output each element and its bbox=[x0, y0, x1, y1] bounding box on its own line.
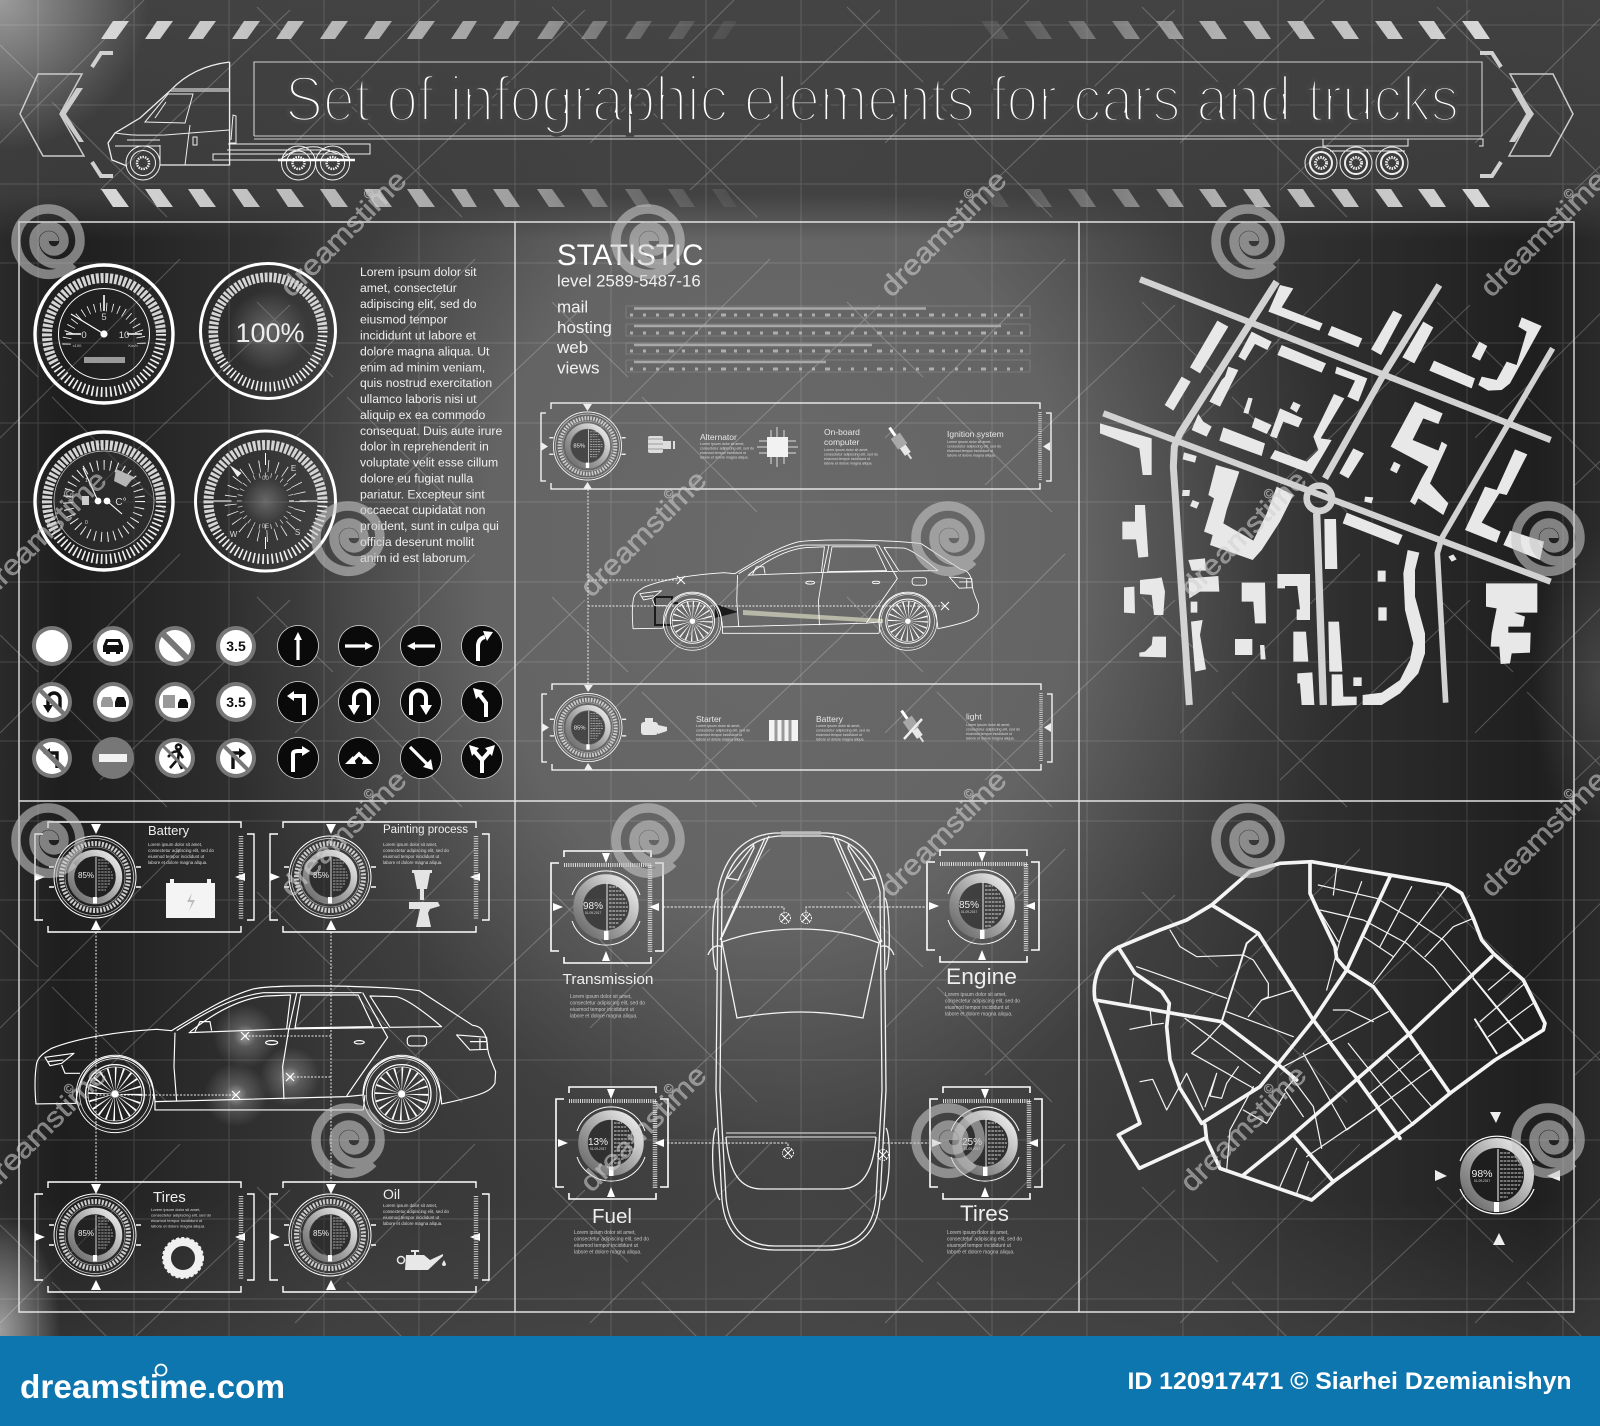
label: oil: Oil bbox=[383, 1186, 400, 1202]
label: ignition system bbox=[947, 429, 1004, 458]
icon: bulb plug bbox=[897, 707, 928, 745]
icon: chip bbox=[757, 427, 798, 467]
label: starter: eiusmod tempor incididunt ut bbox=[696, 733, 742, 737]
icon: starter bbox=[641, 718, 667, 735]
logo: dreamstime.com: dreamstime.com bbox=[20, 1368, 285, 1405]
text: transmission description: labore et dolore magna aliqua. bbox=[570, 1014, 638, 1020]
text: battery description: labore et dolore magna aliqua. bbox=[148, 860, 207, 865]
text block: lorem ipsum: ullamco laboris nisi ut bbox=[360, 392, 477, 406]
gauge: speedometer: Km/h bbox=[128, 343, 138, 348]
card: tires bbox=[35, 1182, 254, 1292]
watermark: dreamstime text: © bbox=[60, 485, 78, 502]
label: battery: consectetur adipiscing elit, sed do bbox=[816, 728, 870, 732]
card: transmission: 98% bbox=[583, 901, 603, 912]
gauge: compass: E bbox=[291, 464, 296, 473]
label: alternator: Lorem ipsum dolor sit amet, bbox=[700, 442, 744, 446]
component strip 1 bbox=[541, 403, 1051, 489]
card: engine: 85% bbox=[959, 900, 979, 911]
watermark: dreamstime text: © bbox=[660, 485, 678, 502]
watermark: dreamstime text: dreamstime bbox=[274, 164, 413, 303]
gauge: compass: 00 bbox=[262, 476, 269, 482]
road signs: prohibition: 3.5 bbox=[226, 638, 246, 654]
card: transmission bbox=[551, 851, 663, 1020]
label: starter: consectetur adipiscing elit, sed do bbox=[696, 728, 750, 732]
gauge: fuel and temperature: 1 bbox=[85, 478, 88, 484]
icon: truck cab bbox=[108, 62, 370, 180]
text block: lorem ipsum: dolore magna aliqua. Ut bbox=[360, 344, 490, 358]
watermark: dreamstime text: © bbox=[1260, 1080, 1278, 1097]
gauge: speedometer: 5 bbox=[101, 312, 107, 323]
icon: battery bbox=[166, 879, 215, 918]
gauge: compass: 0E bbox=[262, 524, 269, 530]
text: fuel description: eiusmod tempor incididunt ut bbox=[574, 1243, 639, 1249]
card: tires bbox=[930, 1087, 1042, 1256]
text: engine description: consectetur adipiscing elit, sed do bbox=[945, 998, 1020, 1004]
footer bar bbox=[0, 1336, 1600, 1426]
label: engine: Engine bbox=[946, 964, 1017, 989]
card: battery bbox=[35, 822, 254, 932]
text block: lorem ipsum: consequat. Duis aute irure bbox=[360, 424, 502, 438]
text: oil description: labore et dolore magna aliqua. bbox=[383, 1221, 442, 1226]
gauge: fuel and temperature bbox=[35, 432, 173, 570]
icon: trailer wheels bbox=[1305, 139, 1483, 179]
watermark: dreamstime text: © bbox=[660, 1080, 678, 1097]
road network bbox=[1094, 862, 1545, 1200]
text: battery description: Lorem ipsum dolor sit amet, bbox=[148, 842, 202, 847]
text: oil description: consectetur adipiscing elit, sed do bbox=[383, 1209, 449, 1214]
label: battery: Battery bbox=[148, 823, 190, 838]
illustration: car top view bbox=[708, 833, 894, 1250]
connector lines bbox=[663, 907, 929, 1151]
gauge ring: painting: 85% bbox=[313, 871, 329, 880]
panel: car service diagram bbox=[35, 822, 496, 1292]
watermark: dreamstime text: dreamstime bbox=[574, 464, 713, 603]
text: transmission description: Lorem ipsum dolor sit amet, bbox=[570, 994, 632, 1000]
label: on-board computer: computer bbox=[824, 437, 860, 447]
label: battery: Battery bbox=[816, 714, 844, 724]
label: ignition system: labore et dolore magna aliqua. bbox=[947, 454, 996, 458]
text block: lorem ipsum: eiusmod tempor bbox=[360, 312, 447, 326]
text: tires description: eiusmod tempor incididunt ut bbox=[151, 1218, 203, 1223]
card: tires: 25% bbox=[962, 1137, 982, 1148]
gauge ring: 85 percent: 85% bbox=[574, 725, 586, 731]
label: ignition system: consectetur adipiscing elit, sed do bbox=[947, 444, 1001, 448]
label: light: light bbox=[966, 712, 982, 722]
card: engine bbox=[927, 850, 1039, 1018]
watermark: dreamstime text: dreamstime bbox=[274, 764, 413, 903]
watermark: dreamstime text: dreamstime bbox=[874, 764, 1013, 903]
gauge ring: 85 percent bbox=[549, 412, 626, 480]
buildings bbox=[1100, 285, 1544, 706]
label: on-board computer: eiusmod tempor incididunt ut bbox=[824, 457, 870, 461]
legend labels: hosting bbox=[557, 318, 612, 337]
legend labels: mail bbox=[557, 298, 588, 316]
gauge: speedometer: x100 bbox=[73, 343, 82, 348]
component strip 2 bbox=[542, 684, 1052, 770]
label: on-board computer bbox=[824, 427, 878, 466]
label: tires: Tires bbox=[960, 1201, 1009, 1226]
icon: right chevron bbox=[1480, 53, 1573, 176]
text: engine description: Lorem ipsum dolor sit amet, bbox=[945, 992, 1007, 998]
label: starter bbox=[696, 714, 750, 742]
heading: statistic: STATISTIC bbox=[557, 239, 703, 272]
connector lines bbox=[96, 932, 331, 1181]
gauge: 100 percent bbox=[200, 264, 336, 398]
text: fuel description: consectetur adipiscing elit, sed do bbox=[574, 1236, 649, 1242]
label: on-board computer: labore et dolore magna aliqua. bbox=[824, 462, 873, 466]
label: light: labore et dolore magna aliqua. bbox=[966, 736, 1015, 740]
text block: lorem ipsum: proident, sunt in culpa qui bbox=[360, 519, 499, 533]
watermark: dreamstime text: © bbox=[1560, 185, 1578, 202]
label: on-board computer: On-board bbox=[824, 427, 860, 437]
text block: lorem ipsum: dolor in reprehenderit in bbox=[360, 440, 489, 454]
credit line: ID 120917471 © Siarhei Dzemianishyn bbox=[1128, 1368, 1572, 1395]
text block: lorem ipsum: Lorem ipsum dolor sit bbox=[360, 265, 477, 279]
label: battery: eiusmod tempor incididunt ut bbox=[816, 733, 862, 737]
gauge: compass: S bbox=[295, 528, 300, 537]
text block: lorem ipsum: amet, consectetur bbox=[360, 281, 457, 295]
label: fuel: Fuel bbox=[592, 1206, 632, 1228]
watermark: dreamstime text: © bbox=[1560, 785, 1578, 802]
text: battery description: eiusmod tempor incididunt ut bbox=[148, 854, 205, 859]
text block: lorem ipsum: aliquip ex ea commodo bbox=[360, 408, 486, 422]
bar chart bbox=[626, 306, 1030, 372]
label: on-board computer: consectetur adipiscing elit, sed do bbox=[824, 452, 878, 456]
watermark: dreamstime text: dreamstime bbox=[574, 1059, 713, 1198]
label: starter: labore et dolore magna aliqua. bbox=[696, 738, 745, 742]
gauge ring: 98 percent bbox=[1435, 1112, 1560, 1245]
text: tires description: Lorem ipsum dolor sit amet, bbox=[947, 1230, 1009, 1236]
watermark: dreamstime text: © bbox=[1260, 485, 1278, 502]
text: painting description: consectetur adipiscing elit, sed do bbox=[383, 848, 449, 853]
text: tires description: labore et dolore magna aliqua. bbox=[151, 1224, 205, 1228]
label: painting process: Painting process bbox=[383, 824, 468, 836]
text: battery description: consectetur adipiscing elit, sed do bbox=[148, 848, 214, 853]
text: painting description: eiusmod tempor incididunt ut bbox=[383, 854, 440, 859]
icon: battery bbox=[769, 720, 798, 741]
watermark: dreamstime text: dreamstime bbox=[874, 164, 1013, 303]
watermark: dreamstime text: © bbox=[360, 185, 378, 202]
icon: left chevron bbox=[20, 53, 113, 176]
card: fuel bbox=[556, 1087, 668, 1256]
card: tires: 01-09-2017 bbox=[964, 1147, 980, 1151]
gauge: speedometer bbox=[35, 265, 173, 403]
text: oil description: eiusmod tempor incididunt ut bbox=[383, 1215, 440, 1220]
decorative dash rows bbox=[101, 21, 1490, 207]
text: engine description: labore et dolore magna aliqua. bbox=[945, 1012, 1013, 1018]
watermark: dreamstime text: © bbox=[960, 785, 978, 802]
gauge ring: battery: 85% bbox=[78, 871, 94, 880]
card: transmission: 01-09-2017 bbox=[585, 911, 601, 915]
road signs: prohibition bbox=[32, 626, 256, 779]
road signs: direction bbox=[278, 626, 502, 778]
text: tires description: consectetur adipiscing elit, sed do bbox=[151, 1212, 212, 1218]
legend labels: web bbox=[556, 338, 588, 357]
card: fuel: 01-09-2017 bbox=[590, 1147, 606, 1151]
card: oil bbox=[270, 1182, 489, 1292]
gauge: 100 percent: 100% bbox=[235, 318, 305, 348]
text: level code: level 2589-5487-16 bbox=[557, 272, 701, 290]
text: transmission description: consectetur adipiscing elit, sed do bbox=[570, 1000, 645, 1006]
card: engine: 01-09-2017 bbox=[961, 910, 977, 914]
label: light bbox=[966, 712, 1020, 740]
gauge: fuel and temperature: C° bbox=[115, 497, 127, 508]
text: painting description: labore et dolore magna aliqua. bbox=[383, 860, 442, 865]
icon: oil can bbox=[398, 1250, 446, 1270]
gauge ring: 98 percent: 98% bbox=[1471, 1168, 1493, 1180]
label: tires: Tires bbox=[153, 1189, 186, 1206]
watermark: dreamstime text: dreamstime bbox=[1174, 1059, 1313, 1198]
title frame bbox=[254, 62, 1482, 139]
text block: lorem ipsum: occaecat cupidatat non bbox=[360, 503, 485, 517]
road signs: prohibition: 3.5 bbox=[226, 694, 246, 710]
gauge ring: oil: 85% bbox=[313, 1229, 329, 1238]
text block: lorem ipsum: anim id est laborum. bbox=[360, 551, 470, 565]
gauge: compass bbox=[196, 431, 336, 571]
watermark: dreamstime text: © bbox=[960, 185, 978, 202]
gauge: speedometer: 10 bbox=[119, 330, 129, 341]
gauge ring: oil bbox=[284, 1194, 376, 1276]
label: alternator: eiusmod tempor incididunt ut bbox=[700, 451, 746, 455]
label: alternator: labore et dolore magna aliqua. bbox=[700, 456, 749, 460]
legend labels bbox=[556, 298, 612, 378]
label: starter: Starter bbox=[696, 714, 722, 724]
text: fuel description: Lorem ipsum dolor sit amet, bbox=[574, 1230, 636, 1236]
gauge: compass: W bbox=[230, 530, 238, 539]
text block: lorem ipsum: quis nostrud exercitation bbox=[360, 376, 492, 390]
gauge ring: tires bbox=[49, 1194, 141, 1276]
watermark: dreamstime text: dreamstime bbox=[1474, 764, 1600, 903]
panel: city road map bbox=[1094, 862, 1560, 1245]
icon: logo spiral bbox=[156, 1364, 166, 1376]
title: Set of infographic elements for cars and trucks bbox=[285, 63, 1459, 135]
watermark: dreamstime text bbox=[0, 163, 1600, 1198]
text: engine description: eiusmod tempor incididunt ut bbox=[945, 1005, 1010, 1011]
card: fuel: 13% bbox=[588, 1137, 608, 1148]
gauge ring: tires: 85% bbox=[78, 1229, 94, 1238]
gauge: fuel and temperature: 0 bbox=[85, 520, 88, 526]
text block: lorem ipsum: dolore eu fugiat nulla bbox=[360, 472, 473, 486]
text block: lorem ipsum: pariatur. Excepteur sint bbox=[360, 488, 485, 502]
text: oil description: Lorem ipsum dolor sit amet, bbox=[383, 1203, 437, 1208]
icon: spark plug bbox=[885, 424, 916, 462]
connector lines bbox=[588, 489, 945, 684]
label: alternator: Alternator bbox=[700, 432, 737, 442]
label: transmission: Transmission bbox=[562, 971, 654, 988]
text: painting description: Lorem ipsum dolor sit amet, bbox=[383, 842, 437, 847]
header band bbox=[20, 21, 1573, 207]
gauge: speedometer: 0 bbox=[81, 330, 87, 341]
text: transmission description: eiusmod tempor incididunt ut bbox=[570, 1007, 635, 1013]
text: tires description: Lorem ipsum dolor sit amet, bbox=[151, 1207, 200, 1212]
panel: top view car diagram bbox=[551, 833, 1042, 1256]
panel: statistic and car components bbox=[541, 239, 1052, 770]
panel: gauges and signs bbox=[32, 264, 506, 779]
watermark: dreamstime text: © bbox=[60, 1080, 78, 1097]
label: light: eiusmod tempor incididunt ut bbox=[966, 732, 1012, 736]
label: ignition system: Ignition system bbox=[947, 429, 1004, 439]
label: light: consectetur adipiscing elit, sed do bbox=[966, 728, 1020, 732]
panel: city map buildings bbox=[1100, 279, 1553, 706]
text: tires description: eiusmod tempor incididunt ut bbox=[947, 1243, 1012, 1249]
text block: lorem ipsum: incididunt ut labore et bbox=[360, 328, 476, 342]
icon: alternator bbox=[648, 436, 675, 453]
label: battery: Lorem ipsum dolor sit amet, bbox=[816, 724, 860, 728]
illustration: car side view small bbox=[632, 540, 979, 650]
watermark: dreamstime text: dreamstime bbox=[1174, 464, 1313, 603]
illustration: car side view large bbox=[35, 986, 496, 1133]
label: battery: labore et dolore magna aliqua. bbox=[816, 738, 865, 742]
x markers bbox=[780, 912, 888, 1160]
gauge ring: battery bbox=[49, 836, 141, 918]
label: alternator: consectetur adipiscing elit, sed do bbox=[700, 446, 754, 450]
watermark: dreamstime text: © bbox=[360, 785, 378, 802]
legend labels: views bbox=[557, 358, 600, 378]
label: ignition system: Lorem ipsum dolor sit amet, bbox=[947, 440, 991, 444]
watermark: dreamstime text: dreamstime bbox=[1474, 164, 1600, 303]
text block: lorem ipsum: enim ad minim veniam, bbox=[360, 360, 485, 374]
watermark: spirals bbox=[16, 209, 1580, 1173]
card: painting process bbox=[270, 822, 489, 932]
text block: lorem ipsum: voluptate velit esse cillum bbox=[360, 456, 498, 470]
gauge ring: 85 percent: 85% bbox=[573, 444, 585, 450]
roads bbox=[1103, 279, 1553, 705]
icon: spray gun bbox=[409, 870, 440, 927]
label: starter: Lorem ipsum dolor sit amet, bbox=[696, 724, 740, 728]
label: alternator bbox=[700, 432, 754, 460]
panel frame bbox=[19, 222, 1574, 1312]
label: battery bbox=[816, 714, 870, 742]
icon: tire bbox=[164, 1238, 202, 1278]
text block: lorem ipsum: officia deserunt mollit bbox=[360, 535, 475, 549]
label: on-board computer: Lorem ipsum dolor sit amet, bbox=[824, 448, 868, 452]
gauge ring: 98 percent: 01-09-2017 bbox=[1474, 1179, 1490, 1183]
label: ignition system: eiusmod tempor incididunt ut bbox=[947, 449, 993, 453]
text: tires description: labore et dolore magna aliqua. bbox=[947, 1250, 1015, 1256]
text: tires description: consectetur adipiscing elit, sed do bbox=[947, 1236, 1022, 1242]
gauge ring: 85 percent bbox=[550, 694, 626, 762]
gauge ring: painting bbox=[284, 836, 376, 918]
text: fuel description: labore et dolore magna aliqua. bbox=[574, 1250, 642, 1256]
label: light: Lorem ipsum dolor sit amet, bbox=[966, 723, 1010, 727]
text block: lorem ipsum: adipiscing elit, sed do bbox=[360, 297, 477, 311]
